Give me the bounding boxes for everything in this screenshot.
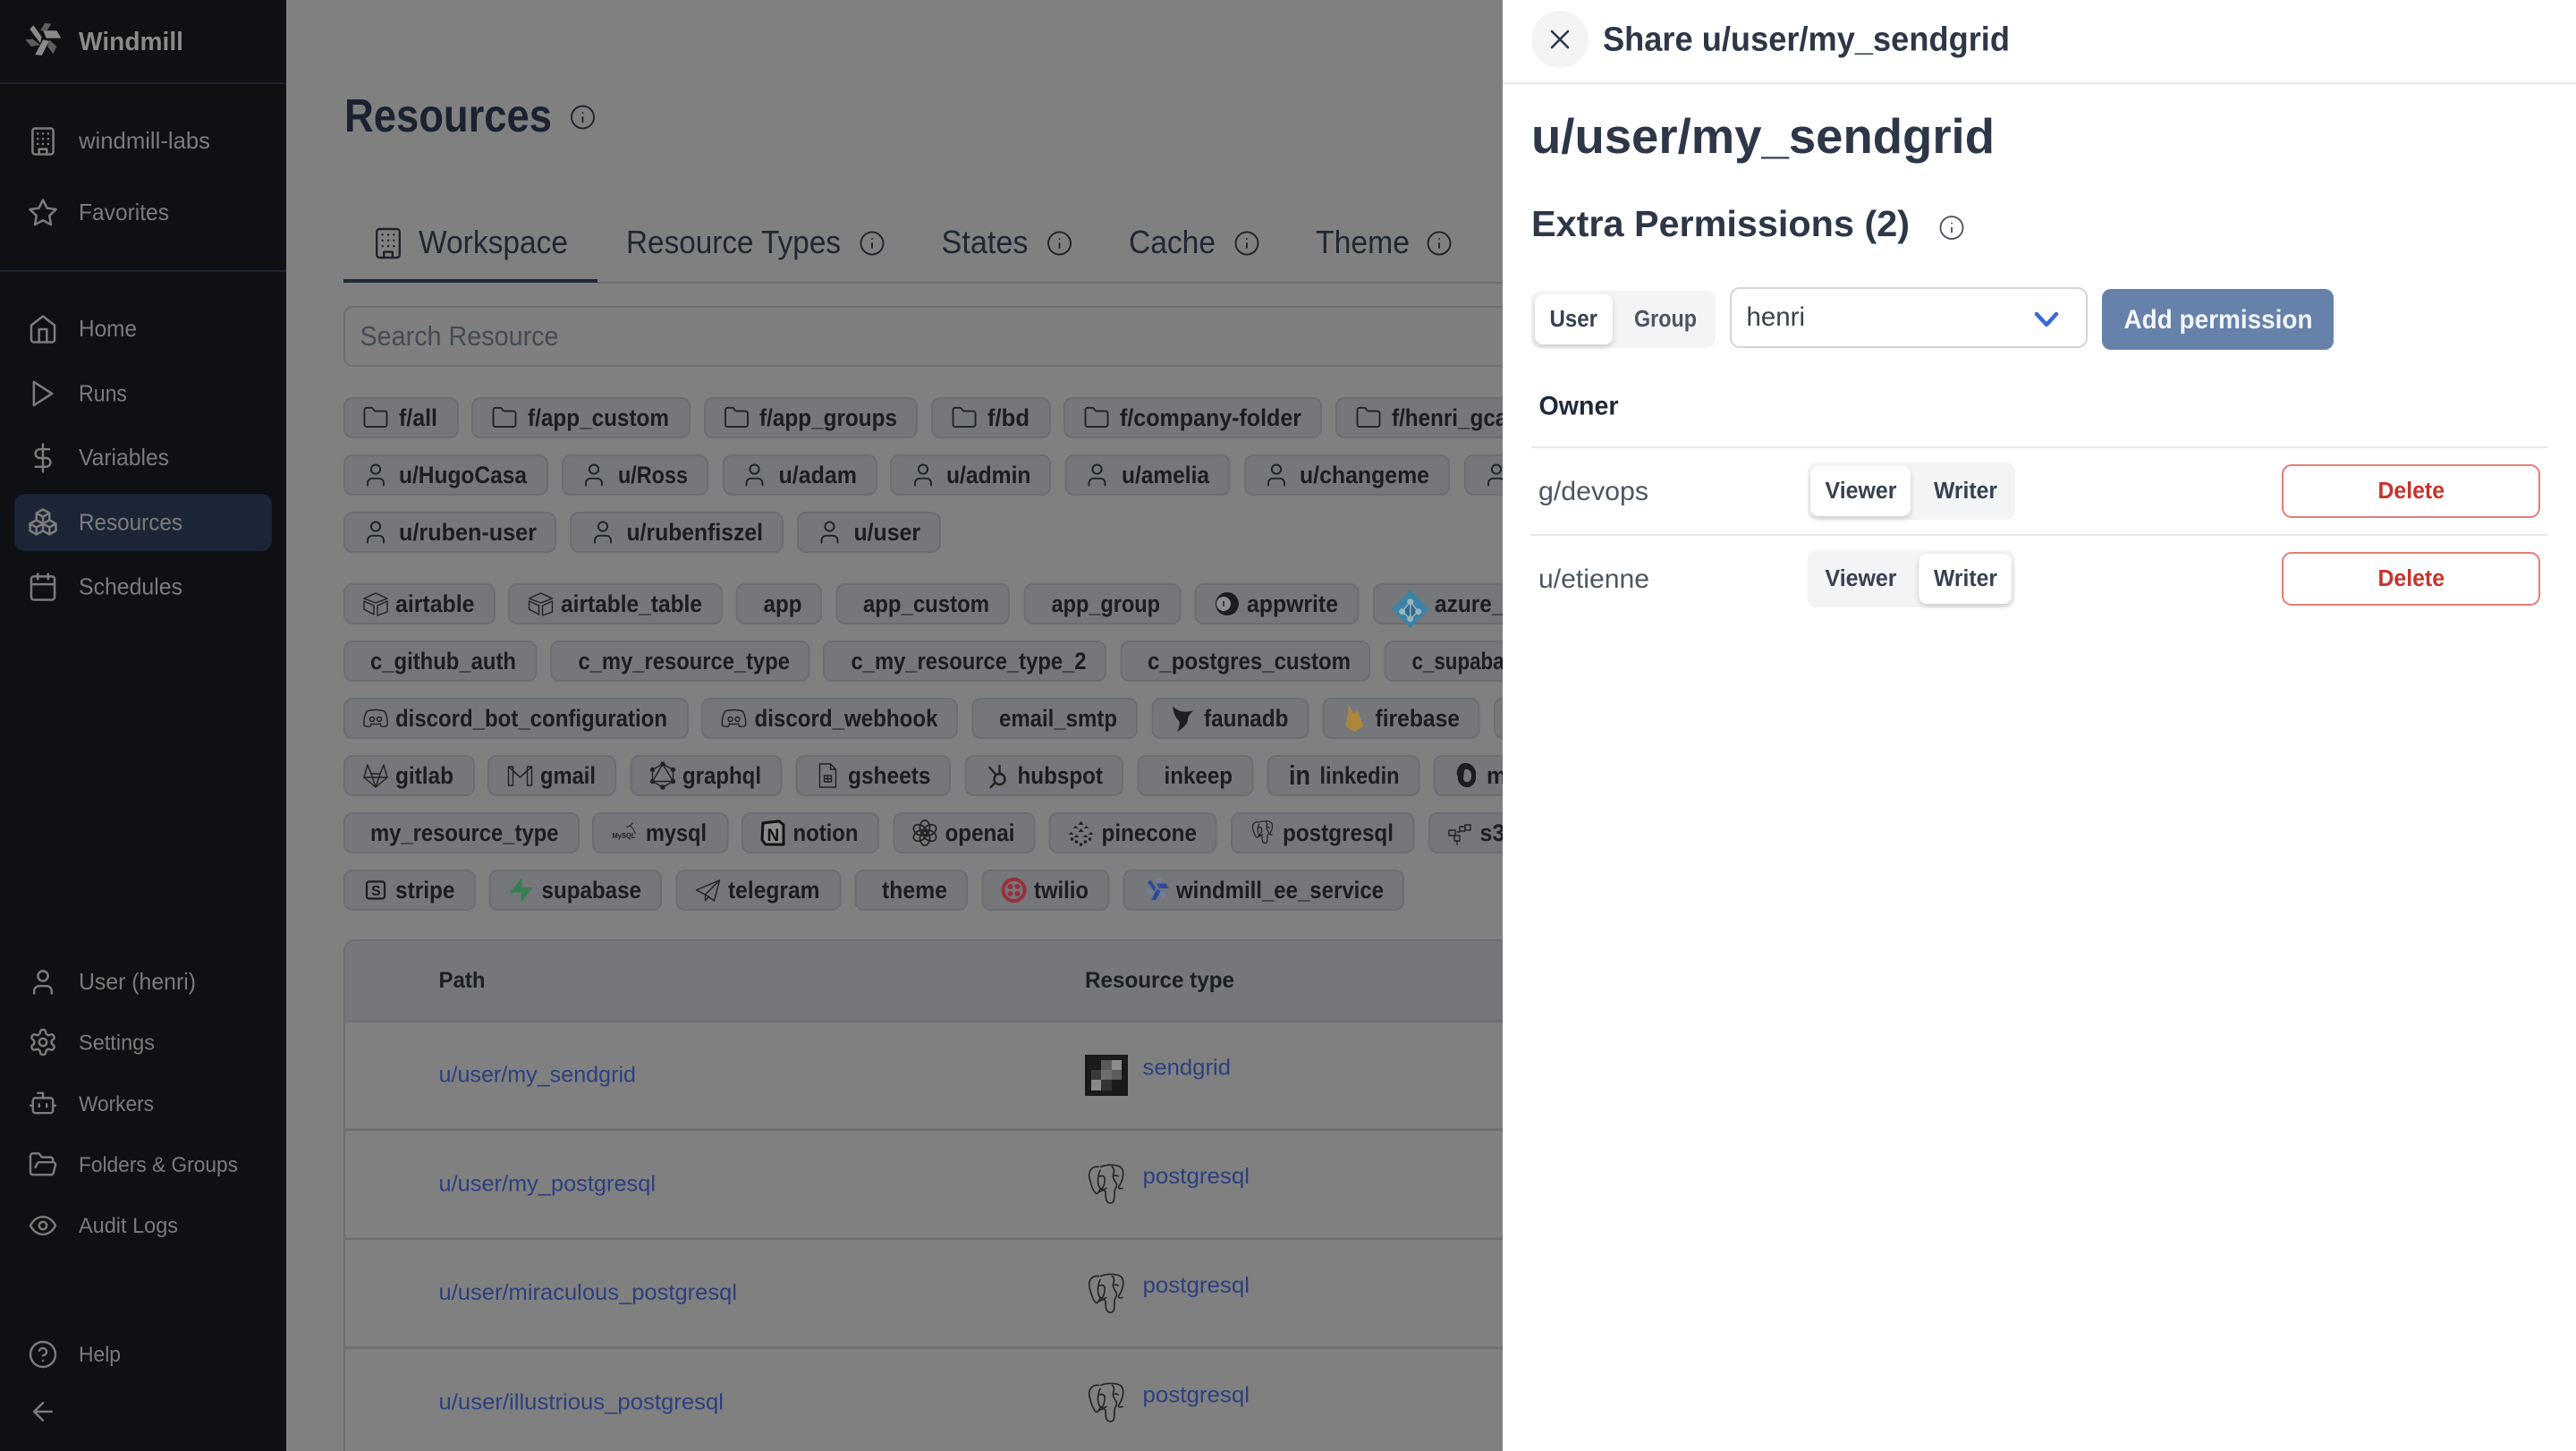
- close button: [1531, 11, 1589, 68]
- chip: c_postgres_custom: c_postgres_custom: [1148, 648, 1351, 675]
- nav item: Variables: Variables: [79, 444, 169, 471]
- permission row: u/etienne: Writer: [1934, 566, 1997, 591]
- chip: mysql: MySQL: [612, 832, 636, 840]
- chip: airtable: airtable: [395, 590, 474, 617]
- toggle: User / Group: [1531, 291, 1716, 348]
- chip: graphql: graphql: [682, 762, 761, 789]
- row: u/user/miraculous_postgresql: postgresql: [1143, 1273, 1250, 1298]
- nav item: Settings: [31, 1030, 155, 1056]
- chip: discord_bot_configuration: discord_bot_configuration: [395, 705, 667, 732]
- search field: [344, 307, 1597, 366]
- chip: gsheets: [796, 756, 950, 795]
- nav item: User (henri): User (henri): [79, 968, 196, 995]
- chip: openai: [894, 813, 1034, 853]
- nav item: Schedules: [31, 573, 182, 599]
- chip: email_smtp: [973, 699, 1137, 738]
- chip: app_custom: app_custom: [863, 590, 989, 617]
- chip: discord_webhook: discord_webhook: [755, 705, 938, 732]
- nav item: Home: Home: [79, 315, 137, 342]
- chip: f/all: f/all: [399, 404, 437, 431]
- chip: u/HugoCasa: [344, 455, 547, 495]
- logo: Windmill: Windmill: [79, 28, 183, 56]
- icon: sendgrid: [1085, 1055, 1128, 1096]
- chip: faunadb: faunadb: [1204, 705, 1288, 732]
- chip: c_supabase: [1385, 641, 1563, 681]
- chip: graphql: [631, 756, 782, 795]
- chip: hubspot: [966, 756, 1123, 795]
- chip: gitlab: gitlab: [395, 762, 453, 789]
- chip: f/bd: [932, 398, 1050, 437]
- chip: u/admin: u/admin: [946, 462, 1030, 488]
- logo: Windmill: [25, 23, 183, 56]
- chip: gmail: gmail: [540, 762, 596, 789]
- permission row: g/devops: Delete: [2377, 479, 2445, 504]
- permission row: g/devops: g/devops: [1538, 477, 1648, 506]
- chip: partially hidden: [1495, 699, 1602, 738]
- chip: inkeep: [1138, 756, 1252, 795]
- chip: u/user: [798, 513, 940, 552]
- button: Add permission: [2102, 289, 2334, 350]
- chip: c_my_resource_type: [551, 641, 809, 681]
- chip: postgresql: postgresql: [1283, 819, 1394, 846]
- chip: u/rubenfiszel: u/rubenfiszel: [626, 519, 763, 546]
- chip: f/app_custom: f/app_custom: [528, 404, 669, 431]
- row: u/user/illustrious_postgresql: postgresql: [1143, 1383, 1250, 1408]
- chip: u/rubenfiszel: [571, 513, 783, 552]
- nav item: Help: [30, 1342, 121, 1367]
- chip: u/admin: [891, 455, 1050, 495]
- chip: app_group: app_group: [1052, 590, 1160, 617]
- select: henri: [1731, 288, 2087, 347]
- nav item: Folders & Groups: Folders & Groups: [79, 1153, 238, 1177]
- row: u/user/illustrious_postgresql: [438, 1383, 1250, 1421]
- nav item: Help: Help: [79, 1343, 121, 1367]
- toggle: User / Group: Group: [1634, 307, 1697, 332]
- chip: f/all: [344, 398, 458, 437]
- permission row: u/etienne: u/etienne: [1538, 564, 1649, 594]
- label: Owner: Owner: [1538, 392, 1619, 420]
- chip: c_github_auth: c_github_auth: [370, 648, 516, 675]
- heading: Extra Permissions: Extra Permissions (2): [1531, 203, 1910, 244]
- chip: u/adam: u/adam: [778, 462, 857, 488]
- chip: u/amelia: [1066, 455, 1229, 495]
- chip: gmail: [488, 756, 615, 795]
- chip: discord_webhook: [702, 699, 957, 738]
- chip: f/app_custom: [472, 398, 690, 437]
- page heading: Resources: Resources: [344, 90, 552, 142]
- row: u/user/miraculous_postgresql: [438, 1273, 1250, 1312]
- row: u/user/my_sendgrid: [438, 1055, 1231, 1096]
- chip: u/amelia: u/amelia: [1122, 462, 1210, 488]
- chip: s3: s3: [1479, 819, 1504, 846]
- chip: f/company-folder: [1064, 398, 1321, 437]
- chip: c_my_resource_type_2: [824, 641, 1106, 681]
- chip: u/Ross: u/Ross: [618, 462, 688, 488]
- nav item: Variables: [36, 444, 169, 471]
- toggle: User / Group: User: [1549, 307, 1597, 332]
- resources table: [344, 940, 1521, 1451]
- nav item: Runs: [34, 379, 127, 406]
- chip: notion: N: [767, 827, 779, 845]
- row: u/user/my_sendgrid: sendgrid: [1143, 1056, 1231, 1081]
- chip: email_smtp: email_smtp: [999, 705, 1117, 732]
- chip: app: [737, 584, 821, 624]
- nav item: Audit Logs: [30, 1214, 178, 1238]
- chip: f/company-folder: f/company-folder: [1120, 404, 1301, 431]
- tabs: Cache: [1129, 224, 1216, 260]
- chip: u/Ross: [563, 455, 708, 495]
- chip: faunadb: [1152, 699, 1308, 738]
- nav item: Runs: Runs: [79, 379, 127, 406]
- icon: collapse arrow: [34, 1403, 52, 1421]
- chip: linkedin: [1268, 756, 1419, 795]
- chip: app_group: [1025, 584, 1181, 624]
- chip: my_resource_type: my_resource_type: [370, 819, 558, 846]
- nav item: Schedules: Schedules: [79, 573, 182, 599]
- chip: theme: [855, 870, 967, 910]
- chip: u/ruben-user: u/ruben-user: [399, 519, 537, 546]
- chip: discord_bot_configuration: [344, 699, 688, 738]
- chip: windmill_ee_service: windmill_ee_service: [1175, 877, 1384, 904]
- tabs: States: [941, 224, 1029, 260]
- main content: resources page: [343, 90, 1617, 1451]
- chip: mailchimp: [1435, 756, 1614, 795]
- chip: f/bd: f/bd: [987, 404, 1030, 431]
- chip: windmill_ee_service: [1123, 870, 1403, 910]
- row: u/user/my_postgresql: [438, 1164, 1250, 1203]
- chip: s3: [1429, 813, 1537, 853]
- chip: gitlab: [344, 756, 474, 795]
- chip: inkeep: inkeep: [1165, 762, 1233, 789]
- chip: u/adam: [724, 455, 877, 495]
- chip: u/changeme: [1245, 455, 1449, 495]
- chip: my_resource_type: [344, 813, 579, 853]
- chip: airtable_table: airtable_table: [561, 590, 702, 617]
- chip: telegram: [676, 870, 841, 910]
- chip: c_supabase: c_supabase: [1411, 648, 1526, 675]
- sidebar: [0, 0, 286, 1451]
- chip: c_postgres_custom: [1122, 641, 1369, 681]
- chip: appwrite: appwrite: [1247, 590, 1338, 617]
- tabs: Resource Types: [626, 224, 841, 260]
- chip: f/henri_gcal: [1336, 398, 1569, 437]
- nav item: windmill-labs: windmill-labs: [78, 127, 210, 154]
- permission row: g/devops: [1538, 462, 2539, 520]
- tabs: [343, 224, 1503, 284]
- chip: appwrite: [1195, 584, 1358, 624]
- nav item: Resources (active): Resources: [79, 508, 182, 535]
- search field: Search Resource: [360, 320, 558, 352]
- chip: openai: openai: [945, 819, 1014, 846]
- chip: f/henri_gcal: f/henri_gcal: [1392, 404, 1513, 431]
- tabs: Workspace: [419, 224, 568, 260]
- share drawer panel: [1503, 0, 2576, 1451]
- nav item: Audit Logs: Audit Logs: [79, 1214, 178, 1238]
- heading: resource path: u/user/my_sendgrid: [1531, 108, 1995, 164]
- permission row: u/etienne: [1538, 550, 2539, 607]
- row: u/user/my_sendgrid: u/user/my_sendgrid: [438, 1063, 636, 1088]
- chip: stripe: [344, 870, 475, 910]
- chip: twilio: [982, 870, 1109, 910]
- row: u/user/illustrious_postgresql: u/user/illustrious_postgresql: [438, 1390, 724, 1415]
- nav item: Settings: Settings: [79, 1031, 155, 1056]
- chip: firebase: [1324, 699, 1479, 738]
- chip: app_custom: [837, 584, 1009, 624]
- chip: airtable: [344, 584, 495, 624]
- chip: partially hidden user: [1465, 455, 1617, 495]
- chip: u/HugoCasa: u/HugoCasa: [399, 462, 528, 488]
- chip: f/app_groups: f/app_groups: [759, 404, 897, 431]
- chip: app: app: [764, 590, 801, 617]
- nav item: Home: [31, 315, 137, 342]
- tabs: Theme: [1316, 224, 1410, 260]
- chip: linkedin: linkedin: [1320, 762, 1399, 789]
- permission row: g/devops: Viewer: [1825, 479, 1897, 504]
- button: Add permission: Add permission: [2123, 305, 2313, 335]
- chip: f/app_groups: [705, 398, 917, 437]
- row: u/user/my_postgresql: postgresql: [1143, 1164, 1250, 1189]
- nav item: Resources (active): [14, 494, 272, 551]
- chip: stripe: S: [371, 884, 381, 899]
- chip: firebase: firebase: [1376, 705, 1460, 732]
- row: u/user/miraculous_postgresql: u/user/miraculous_postgresql: [438, 1280, 737, 1305]
- nav item: Favorites: [30, 199, 169, 225]
- row: u/user/my_postgresql: u/user/my_postgresql: [438, 1172, 656, 1197]
- chip: telegram: telegram: [728, 877, 819, 904]
- chip: theme: theme: [882, 877, 947, 904]
- chip: supabase: supabase: [542, 877, 641, 904]
- select: henri: henri: [1746, 302, 1805, 332]
- chip: pinecone: [1050, 813, 1216, 853]
- chip: pinecone: pinecone: [1102, 819, 1197, 846]
- chip: u/user: u/user: [853, 519, 920, 546]
- chip: mysql: mysql: [646, 819, 707, 846]
- permission row: u/etienne: Delete: [2377, 566, 2445, 591]
- chip: c_github_auth: [344, 641, 537, 681]
- nav item: Favorites: Favorites: [79, 199, 169, 225]
- chip: twilio: twilio: [1034, 877, 1089, 904]
- chip: hubspot: hubspot: [1018, 762, 1103, 789]
- nav item: Workers: Workers: [79, 1092, 154, 1116]
- chip: supabase: [490, 870, 661, 910]
- chip: postgresql: [1232, 813, 1413, 853]
- chip: notion: [742, 813, 878, 853]
- chip: stripe: stripe: [395, 877, 454, 904]
- permission row: g/devops: Writer: [1934, 479, 1997, 504]
- chip: c_my_resource_type_2: c_my_resource_type_2: [852, 648, 1086, 675]
- drawer title: Share u/user/my_sendgrid: [1603, 21, 2010, 59]
- chip: azure: azure_oauth: [1435, 590, 1563, 617]
- chip: notion: notion: [792, 819, 859, 846]
- chip: linkedin: in: [1289, 759, 1310, 791]
- table header: Path: Path: [438, 968, 485, 993]
- chip: u/ruben-user: [344, 513, 555, 552]
- chip: c_my_resource_type: c_my_resource_type: [578, 648, 790, 675]
- chip: azure: [1374, 584, 1589, 627]
- chip: u/changeme: u/changeme: [1300, 462, 1429, 488]
- chip: gsheets: gsheets: [848, 762, 930, 789]
- chip: airtable_table: [509, 584, 722, 624]
- chip: mailchimp: mailchimp: [1487, 762, 1598, 789]
- nav item: Workers: [30, 1092, 154, 1116]
- table header: Resource type: Resource type: [1085, 968, 1234, 993]
- chip: mysql: [593, 813, 728, 853]
- permission row: u/etienne: Viewer: [1825, 566, 1897, 591]
